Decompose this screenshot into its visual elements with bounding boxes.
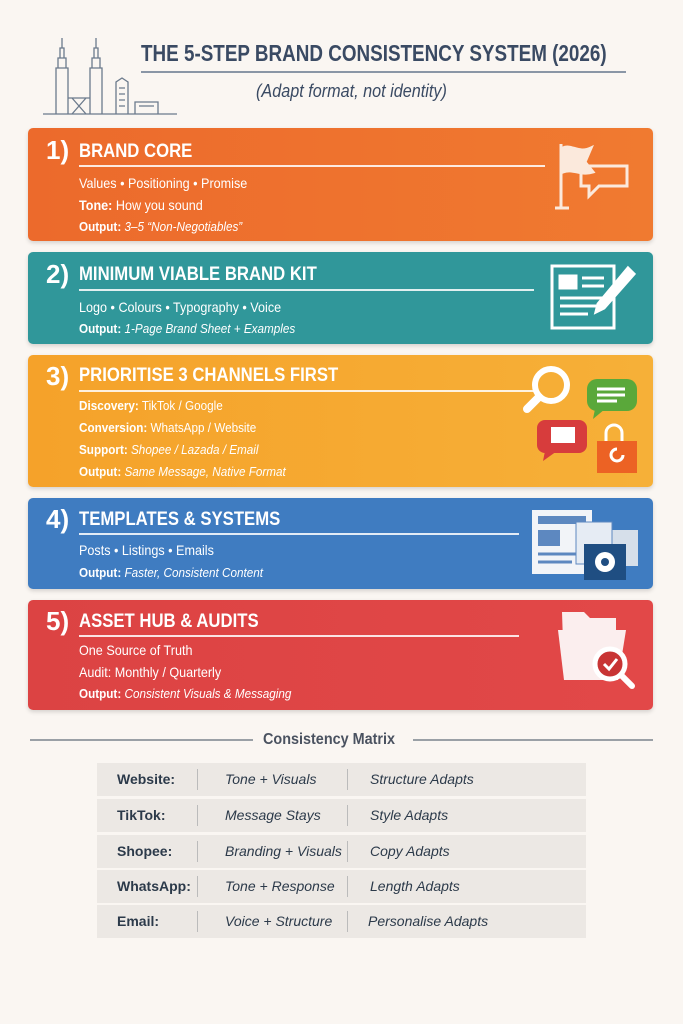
text: asset hub details: Output: Consistent Visuals & Messaging: [79, 686, 291, 701]
step number 3: 3): [46, 361, 69, 391]
text: channel details: [79, 398, 286, 479]
table: consistency matrix: Structure Adapts: [370, 771, 474, 787]
panel: 3 channels: [28, 355, 653, 487]
text: channel details: Support: Shopee / Lazada / Email: [79, 442, 258, 457]
subtitle: (Adapt format, not identity): [256, 81, 447, 101]
icon: city skyline: [43, 38, 177, 115]
text: channel details: Output: Same Message, Native Format: [79, 464, 286, 479]
text: brand core details: Values • Positioning • Promise: [79, 175, 247, 191]
text: channel details: Conversion: WhatsApp / Website: [79, 420, 256, 435]
text: asset hub details: Audit: Monthly / Quarterly: [79, 664, 221, 680]
title: THE 5-STEP BRAND CONSISTENCY SYSTEM (2026): [141, 40, 607, 66]
table: consistency matrix: WhatsApp:: [117, 878, 191, 894]
table: consistency matrix: Branding + Visuals: [225, 843, 342, 859]
text: brand core details: Tone: How you sound: [79, 197, 203, 213]
icon: templates with gear: [532, 510, 638, 580]
panel: 5 asset hub: [28, 600, 653, 710]
text: brand kit details: [79, 299, 295, 336]
heading: asset hub: ASSET HUB & AUDITS: [79, 611, 259, 632]
panel: 4 templates: [28, 498, 653, 589]
table: consistency matrix: Length Adapts: [370, 878, 460, 894]
table: consistency matrix: Voice + Structure: [225, 913, 332, 929]
table: consistency matrix: Message Stays: [225, 807, 321, 823]
title underline: [141, 71, 626, 72]
table: consistency matrix: Personalise Adapts: [368, 913, 488, 929]
table: consistency matrix: TikTok:: [117, 807, 166, 823]
step number 4: 4): [46, 504, 69, 534]
step number 2: 2): [46, 259, 69, 289]
icon: channels cluster: [523, 366, 637, 473]
table: consistency matrix: Shopee:: [117, 843, 172, 859]
panel: 2 brand kit: [28, 252, 653, 344]
table: consistency matrix: Email:: [117, 913, 159, 929]
text: brand kit details: Logo • Colours • Typography • Voice: [79, 299, 281, 315]
matrix heading: Consistency Matrix: [263, 731, 395, 748]
text: channel details: Discovery: TikTok / Google: [79, 398, 223, 413]
table: consistency matrix: Tone + Response: [225, 878, 335, 894]
table: consistency matrix: Style Adapts: [370, 807, 448, 823]
icon: folder with magnifier: [558, 612, 635, 689]
text: templates details: [79, 542, 264, 580]
text: templates details: Output: Faster, Consistent Content: [79, 565, 263, 580]
heading: brand core: BRAND CORE: [79, 141, 192, 162]
text: asset hub details: One Source of Truth: [79, 642, 192, 658]
heading: brand kit: MINIMUM VIABLE BRAND KIT: [79, 264, 317, 285]
text: brand core details: Output: 3–5 “Non-Negotiables”: [79, 219, 242, 234]
icon: document with pencil: [550, 264, 636, 330]
table: consistency matrix: Copy Adapts: [370, 843, 450, 859]
step number 5: 5): [46, 606, 69, 636]
panel: 1 brand core: [28, 128, 653, 241]
step number 1: 1): [46, 135, 69, 165]
table: consistency matrix: [97, 763, 586, 938]
icon: flag with speech bubble: [555, 144, 628, 210]
text: brand core details: [79, 175, 247, 234]
heading: channels: PRIORITISE 3 CHANNELS FIRST: [79, 365, 338, 386]
heading: templates: TEMPLATES & SYSTEMS: [79, 509, 280, 530]
text: templates details: Posts • Listings • Emails: [79, 542, 214, 558]
table: consistency matrix: Tone + Visuals: [225, 771, 316, 787]
text: brand kit details: Output: 1-Page Brand Sheet + Examples: [79, 321, 295, 336]
text: asset hub details: [79, 642, 292, 701]
table: consistency matrix: Website:: [117, 771, 175, 787]
